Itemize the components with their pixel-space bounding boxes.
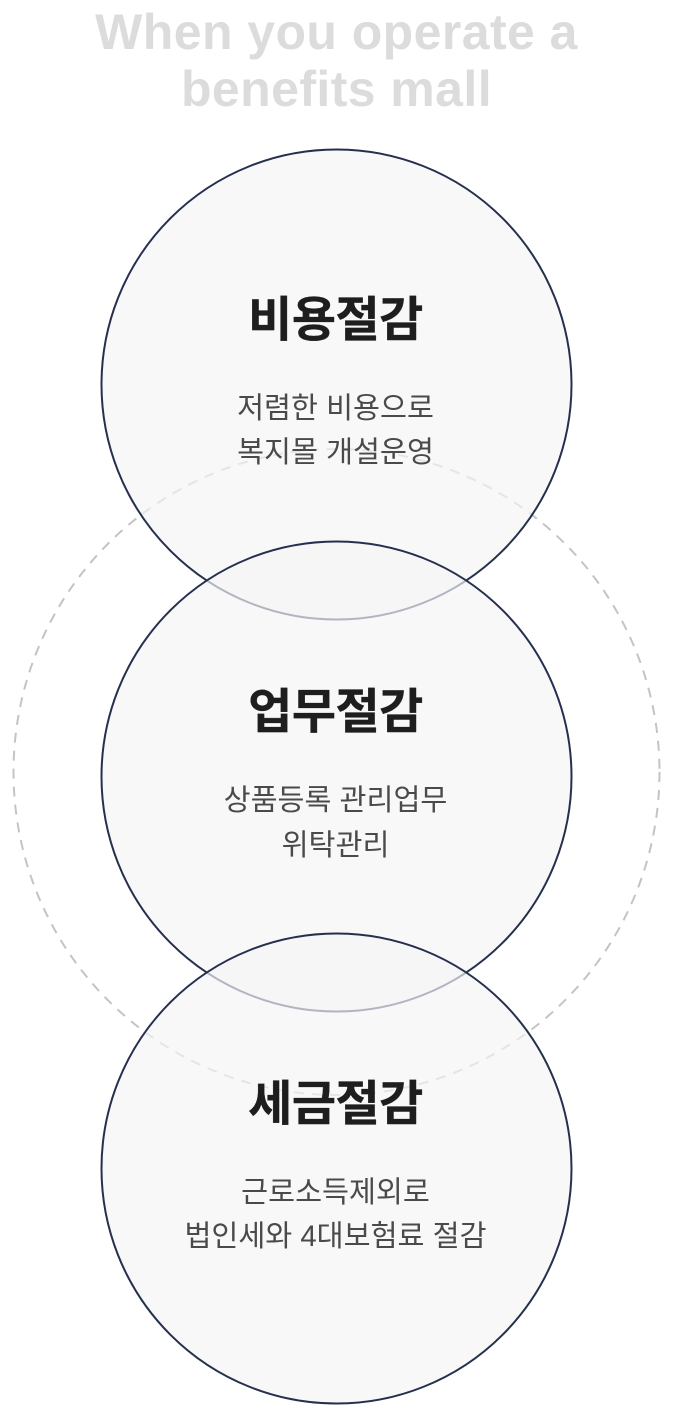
panel: cost saving circle xyxy=(102,150,572,620)
text: work saving description: 상품등록 관리업무 xyxy=(224,784,447,817)
text: tax saving description: 근로소득제외로 xyxy=(241,1176,430,1209)
text: work saving description: 위탁관리 xyxy=(282,829,389,862)
dashed outer ring xyxy=(14,449,660,1095)
text: cost saving description xyxy=(237,392,434,469)
panel: tax saving circle xyxy=(102,934,572,1404)
text: work saving description xyxy=(224,784,447,862)
text: cost saving description: 저렴한 비용으로 xyxy=(237,392,434,425)
heading: cost saving: 비용절감 xyxy=(248,294,423,347)
heading: work saving: 업무절감 xyxy=(248,686,423,739)
heading: tax saving: 세금절감 xyxy=(248,1078,423,1131)
title: benefits mall xyxy=(181,61,492,117)
text: tax saving description: 법인세와 4대보험료 절감 xyxy=(184,1220,487,1253)
title xyxy=(95,4,579,117)
text: tax saving description xyxy=(184,1176,487,1253)
title: When you operate a xyxy=(95,4,579,60)
text: cost saving description: 복지몰 개설운영 xyxy=(237,436,434,469)
panel: work saving circle xyxy=(102,542,572,1012)
